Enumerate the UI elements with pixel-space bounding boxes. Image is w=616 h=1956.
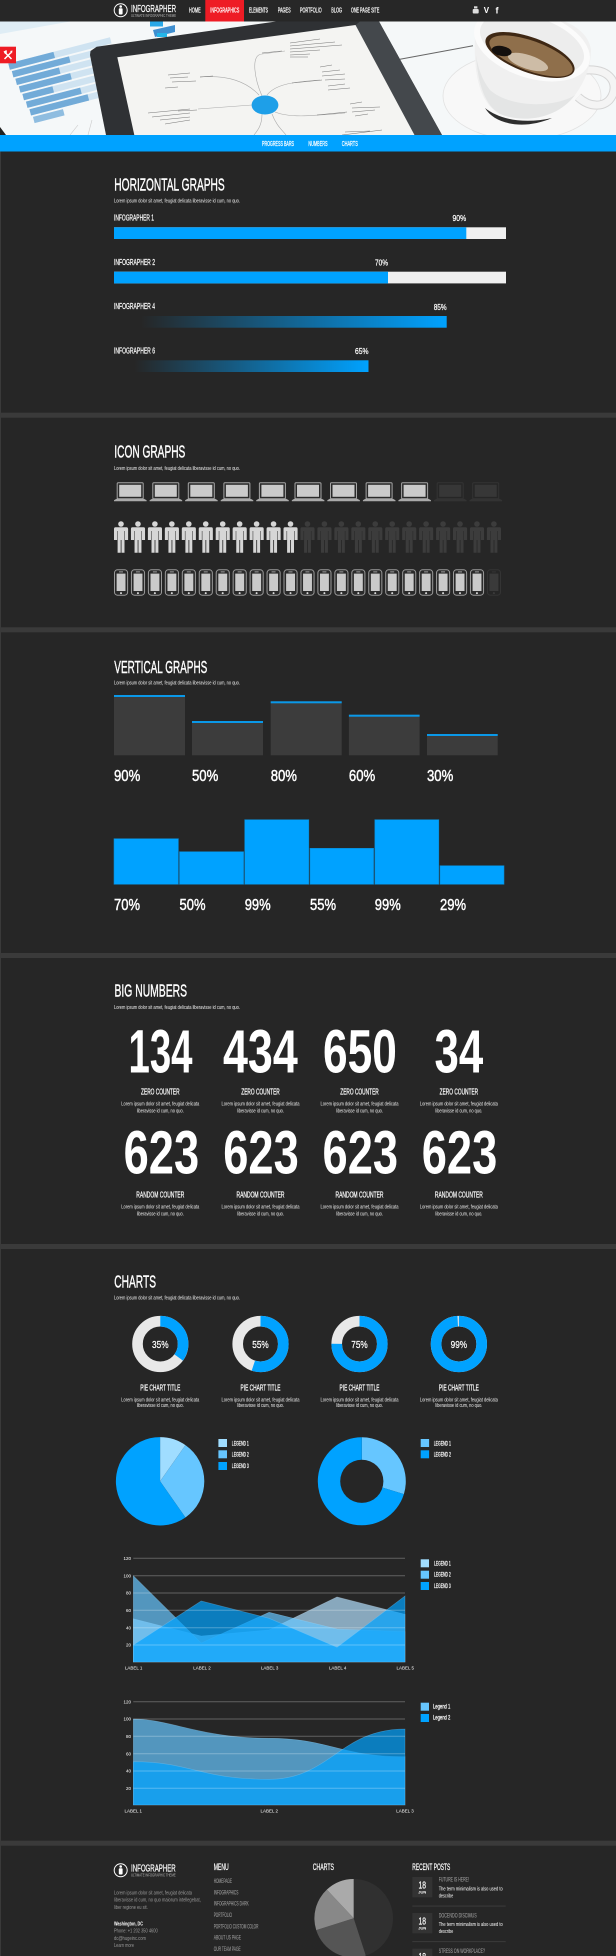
counters row 2: liberavisse id cum, no quo.	[435, 1212, 482, 1218]
area chart 1: LABEL 3	[261, 1665, 279, 1670]
post 1	[412, 1877, 503, 1899]
subtitle: Lorem ipsum dolor sit amet, feugiat delicata liberavisse id cum, no quo.	[114, 198, 240, 204]
blue subnav	[0, 135, 616, 152]
progress bar 6: 65%	[355, 346, 369, 356]
saucer	[442, 60, 602, 135]
area chart 1: 100	[123, 1573, 131, 1578]
donut captions: PIE CHART TITLE	[340, 1384, 380, 1393]
donut 99%	[436, 1321, 482, 1367]
mind map center node	[252, 96, 278, 114]
cup shadow	[485, 108, 552, 125]
tablet screen	[117, 25, 415, 135]
counters row 1: 134	[128, 1018, 193, 1086]
progress bar 6: INFOGRAPHER 6	[114, 345, 155, 355]
area chart 2: 40	[126, 1769, 131, 1774]
faint chart line behind cup	[400, 46, 473, 59]
area chart 1	[123, 1556, 415, 1670]
mind map labels	[148, 39, 382, 135]
donut legend	[421, 1439, 451, 1459]
post 2	[412, 1913, 503, 1935]
progress bar 6	[114, 345, 369, 372]
counters row 2: 623	[223, 1118, 299, 1186]
icon row: laptops	[114, 483, 502, 501]
area chart 1: LABEL 2	[193, 1665, 211, 1670]
progress bar 4: 85%	[434, 302, 447, 312]
counters row 2: liberavisse id cum, no quo.	[237, 1212, 284, 1218]
donut legend: LEGEND 2	[434, 1452, 451, 1459]
panel: vertical graphs	[114, 657, 504, 914]
panel: footer	[114, 1862, 506, 1956]
donut 75%	[337, 1321, 382, 1367]
area chart 2: 60	[126, 1751, 131, 1756]
hero photo: tablet and coffee	[0, 22, 616, 135]
logo	[114, 3, 176, 18]
area chart 2: LABEL 1	[125, 1808, 143, 1813]
footer charts	[313, 1862, 393, 1956]
heading: BIG NUMBERS	[114, 981, 187, 1001]
coffee	[485, 32, 575, 78]
area chart 2 legend: Legend 1	[433, 1703, 451, 1710]
large donut chart	[318, 1437, 406, 1525]
footer recent posts	[412, 1862, 506, 1956]
area chart 2 legend	[421, 1703, 451, 1722]
progress bar 1: INFOGRAPHER 1	[114, 212, 154, 222]
gray column labels: 60%	[349, 768, 375, 785]
donut 55%: 55%	[252, 1339, 269, 1351]
counters row 1: Lorem ipsum dolor sit amet, feugiat delicata	[320, 1102, 399, 1108]
counters row 1: Lorem ipsum dolor sit amet, feugiat delicata	[222, 1102, 300, 1108]
counters row 2: RANDOM COUNTER	[435, 1190, 483, 1199]
nav links: PAGES	[278, 8, 291, 14]
nav links: BLOG	[331, 8, 342, 14]
footer menu: HOMEPAGE	[214, 1879, 232, 1885]
area chart 1: 20	[126, 1643, 131, 1648]
progress bar 1: 90%	[452, 213, 467, 223]
counters row 1: 434	[223, 1018, 298, 1086]
footer about text: liber regione eu sit.	[114, 1905, 148, 1911]
heading: ICON GRAPHS	[114, 441, 185, 461]
counters row 2: RANDOM COUNTER	[136, 1190, 184, 1199]
pie legend	[218, 1439, 249, 1470]
gray column chart	[114, 695, 498, 755]
post 2: 18	[419, 1916, 426, 1927]
panel: icon graphs	[114, 441, 502, 595]
icon row: phones	[114, 570, 500, 595]
footer menu: ABOUT US PAGE	[214, 1936, 241, 1942]
counters row 1: 34	[435, 1018, 483, 1086]
blue column labels: 70%	[114, 897, 140, 914]
blue column labels	[114, 897, 466, 914]
area chart 2	[123, 1699, 414, 1813]
icon row: people	[114, 521, 501, 553]
footer logo: INFOGRAPHER	[131, 1863, 176, 1875]
post 1: describe	[439, 1893, 453, 1899]
area chart 2: 80	[126, 1734, 131, 1739]
counters row 2: liberavisse id cum, no quo.	[137, 1212, 184, 1218]
logo: ULTIMATE INFOGRAPHIC THEME	[131, 13, 176, 18]
donut legend: LEGEND 1	[434, 1440, 451, 1447]
gray column labels: 50%	[192, 768, 218, 785]
counters row 1: Lorem ipsum dolor sit amet, feugiat delicata	[420, 1102, 498, 1108]
counters row 2: 623	[323, 1118, 398, 1186]
blue column labels: 50%	[180, 897, 206, 914]
nav links: PORTFOLIO	[300, 8, 322, 14]
donut captions: Lorem ipsum dolor sit amet, feugiat delicata	[121, 1397, 199, 1403]
area chart 1 legend	[421, 1559, 451, 1590]
pie legend: LEGEND 1	[232, 1440, 249, 1447]
tablet frame	[90, 22, 442, 135]
social icons: V	[484, 6, 490, 15]
footer logo	[114, 1863, 176, 1878]
post 2: JUN	[418, 1925, 426, 1930]
progress bar 1	[114, 212, 506, 239]
counters row 1: Lorem ipsum dolor sit amet, feugiat delicata	[121, 1102, 199, 1108]
footer menu: OUR TEAM PAGE	[214, 1947, 241, 1953]
counters row 1: liberavisse id cum, no quo.	[237, 1109, 284, 1115]
footer about text: dc@hugeinc.com	[114, 1936, 146, 1942]
donut captions: Lorem ipsum dolor sit amet, feugiat delicata	[222, 1397, 300, 1403]
footer recent posts: RECENT POSTS	[412, 1862, 450, 1873]
post 3	[412, 1949, 485, 1956]
gray column labels: 80%	[271, 768, 297, 785]
panel: big numbers	[114, 981, 498, 1218]
donut 35%: 35%	[152, 1339, 169, 1351]
area chart 1 legend: LEGEND 2	[434, 1572, 451, 1579]
donut captions: liberavisse id cum, no quo.	[435, 1403, 482, 1409]
cup rim	[475, 22, 590, 82]
post 3: STRESS ON WORKPLACE?	[439, 1949, 485, 1955]
donut captions: liberavisse id cum, no quo.	[336, 1403, 383, 1409]
counters row 1: ZERO COUNTER	[440, 1087, 478, 1096]
donut 35%	[137, 1321, 183, 1367]
subtitle: Lorem ipsum dolor sit amet, feugiat delicata liberavisse id cum, no quo.	[114, 466, 240, 472]
donut 99%: 99%	[451, 1339, 467, 1351]
area chart 2: LABEL 3	[396, 1808, 414, 1813]
progress bar 4	[114, 301, 447, 328]
nav links: HOME	[189, 8, 201, 14]
progress bar 2: INFOGRAPHER 2	[114, 257, 155, 267]
post 2: describe	[439, 1929, 453, 1935]
counters row 2: RANDOM COUNTER	[236, 1190, 285, 1199]
social icons	[473, 6, 500, 16]
donut captions: PIE CHART TITLE	[439, 1384, 479, 1393]
tools side button	[0, 47, 16, 63]
blue column chart	[114, 820, 504, 884]
footer menu: PORTFOLIO CUSTOM COLOR	[214, 1924, 259, 1930]
footer menu: INFOGRAPHICS	[214, 1890, 238, 1896]
blue column labels: 29%	[440, 897, 466, 914]
counters row 2: 623	[422, 1118, 497, 1186]
counters row 2: Lorem ipsum dolor sit amet, feugiat delicata	[320, 1205, 399, 1211]
progress bar 4: INFOGRAPHER 4	[114, 301, 155, 311]
footer menu	[214, 1862, 259, 1953]
footer about text: Phone: +1 202 350 4600	[114, 1929, 158, 1935]
counters row 2: 623	[124, 1118, 199, 1186]
footer about text: liberavisse id cum, no quo maiorum intellegebat,	[114, 1898, 201, 1904]
donut captions: Lorem ipsum dolor sit amet, feugiat delicata	[320, 1397, 399, 1403]
pie chart	[116, 1437, 204, 1526]
heading: CHARTS	[114, 1271, 156, 1291]
area chart 1 legend: LEGEND 3	[434, 1583, 451, 1590]
blue subnav: PROGRESS BARS	[262, 141, 294, 148]
counters row 1: liberavisse id cum, no quo.	[336, 1109, 383, 1115]
panel: horizontal graphs	[114, 175, 506, 372]
donut captions: PIE CHART TITLE	[240, 1384, 280, 1393]
cup body	[475, 22, 591, 74]
mind map	[198, 51, 345, 135]
pie legend: LEGEND 3	[232, 1463, 249, 1470]
counters row 1: ZERO COUNTER	[340, 1087, 379, 1096]
counters row 2	[121, 1118, 498, 1218]
area chart 1: LABEL 4	[329, 1665, 347, 1670]
footer about text: Learn more	[114, 1943, 134, 1949]
heading: VERTICAL GRAPHS	[114, 657, 207, 677]
counters row 2: Lorem ipsum dolor sit amet, feugiat delicata	[420, 1205, 498, 1211]
area chart 2 legend: Legend 2	[433, 1715, 451, 1722]
area chart 2: LABEL 2	[261, 1808, 279, 1813]
footer about text: Lorem ipsum dolor sit amet, feugiat delicata	[114, 1891, 192, 1897]
counters row 2: RANDOM COUNTER	[336, 1190, 384, 1199]
active menu item highlight	[205, 0, 244, 22]
blue column labels: 99%	[375, 897, 401, 914]
counters row 1: liberavisse id cum, no quo.	[137, 1109, 184, 1115]
blue subnav: CHARTS	[342, 141, 358, 148]
footer menu: MENU	[214, 1862, 229, 1873]
blue subnav: NUMBERS	[308, 141, 328, 148]
area chart 2: 20	[126, 1786, 131, 1791]
post 2: The term minimalism is also used to	[439, 1922, 503, 1928]
counters row 1: 650	[323, 1018, 397, 1086]
footer menu: INFOGRAPHICS DARK	[214, 1902, 249, 1908]
donut captions: liberavisse id cum, no quo.	[237, 1403, 284, 1409]
counters row 1: ZERO COUNTER	[241, 1087, 280, 1096]
navigation bar	[0, 0, 616, 22]
donut captions: Lorem ipsum dolor sit amet, feugiat delicata	[420, 1397, 498, 1403]
blue column labels: 99%	[245, 897, 271, 914]
post 1: JUN	[418, 1890, 426, 1895]
nav links	[189, 8, 379, 14]
panel: charts	[114, 1271, 498, 1813]
counters row 1: liberavisse id cum, no quo.	[435, 1109, 482, 1115]
gray column labels: 90%	[114, 768, 140, 785]
nav links: ONE PAGE SITE	[351, 8, 379, 14]
pie legend: LEGEND 2	[232, 1452, 249, 1459]
post 1: 18	[419, 1881, 426, 1892]
counters row 1: ZERO COUNTER	[141, 1087, 180, 1096]
area chart 1: 120	[123, 1556, 131, 1561]
post 2: DOCENDO DISCIMUS	[439, 1913, 477, 1919]
donut 75%: 75%	[351, 1339, 368, 1351]
donut captions	[121, 1384, 498, 1409]
gray column labels: 30%	[427, 768, 453, 785]
post 1: The term minimalism is also used to	[439, 1886, 503, 1892]
donut 55%	[238, 1321, 283, 1367]
gray column labels	[114, 768, 453, 785]
nav links: INFOGRAPHICS	[210, 8, 239, 14]
counters row 2: liberavisse id cum, no quo.	[336, 1212, 383, 1218]
footer logo: ULTIMATE INFOGRAPHIC THEME	[131, 1873, 176, 1878]
subtitle: Lorem ipsum dolor sit amet, feugiat delicata liberavisse id cum, no quo.	[114, 681, 240, 687]
cup handle	[578, 70, 614, 105]
area chart 1: LABEL 5	[397, 1665, 415, 1670]
area chart 2: 120	[123, 1699, 131, 1704]
area chart 1: 60	[126, 1608, 131, 1613]
page left edge strip	[0, 152, 1, 1956]
subtitle: Lorem ipsum dolor sit amet, feugiat delicata liberavisse id cum, no quo.	[114, 1005, 240, 1011]
footer about text: Washington, DC	[114, 1921, 143, 1927]
subtitle: Lorem ipsum dolor sit amet, feugiat delicata liberavisse id cum, no quo.	[114, 1296, 240, 1302]
counters row 1	[121, 1018, 498, 1115]
counters row 2: Lorem ipsum dolor sit amet, feugiat delicata	[222, 1205, 300, 1211]
paper chart at left	[0, 22, 175, 135]
social icons: f	[496, 6, 500, 16]
progress bar 2	[114, 257, 506, 283]
footer about text	[114, 1891, 201, 1949]
area chart 1: LABEL 1	[125, 1665, 143, 1670]
nav links: ELEMENTS	[249, 8, 268, 14]
logo: INFOGRAPHER	[131, 3, 176, 15]
blue column labels: 55%	[310, 897, 336, 914]
progress bar 2: 70%	[375, 258, 388, 268]
area chart 1 legend: LEGEND 1	[434, 1560, 451, 1567]
post 1: FUTURE IS HERE!	[439, 1878, 469, 1884]
area chart 1: 40	[126, 1625, 131, 1630]
counters row 2: Lorem ipsum dolor sit amet, feugiat delicata	[121, 1205, 199, 1211]
donut captions: PIE CHART TITLE	[140, 1384, 180, 1393]
area chart 1: 80	[126, 1591, 131, 1596]
footer menu: PORTFOLIO	[214, 1913, 232, 1919]
donut captions: liberavisse id cum, no quo.	[137, 1403, 184, 1409]
area chart 2: 100	[123, 1717, 131, 1722]
footer charts: CHARTS	[313, 1862, 334, 1873]
heading: HORIZONTAL GRAPHS	[114, 175, 225, 195]
